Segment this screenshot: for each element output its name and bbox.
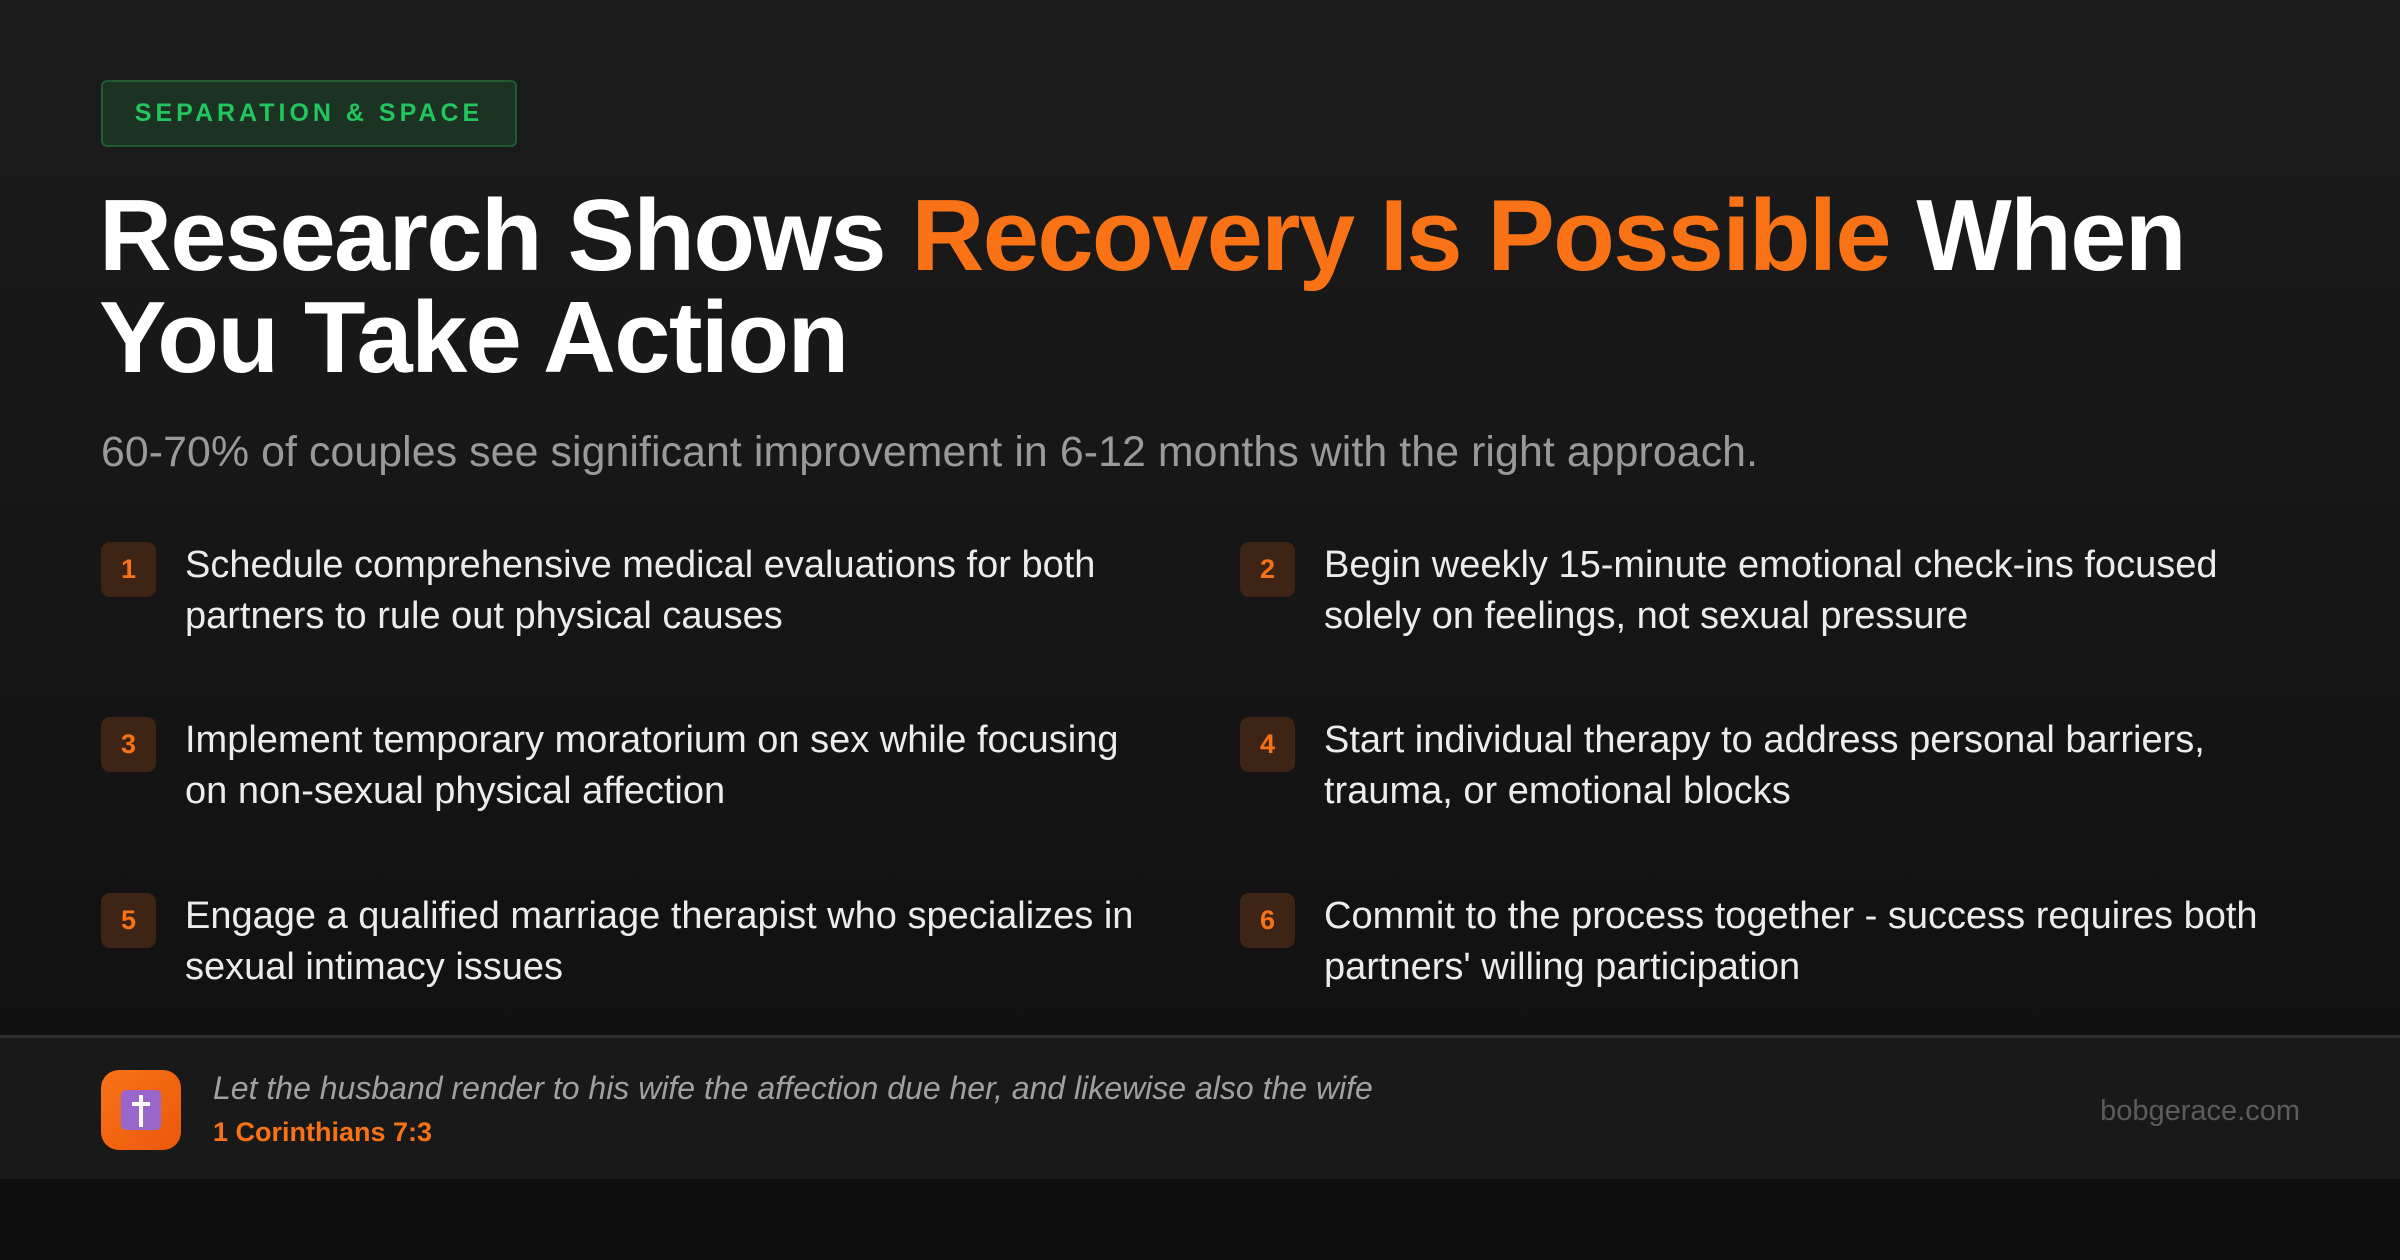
title: You Take Action xyxy=(99,282,848,394)
item 3: 3 xyxy=(121,729,136,759)
item 1: Schedule comprehensive medical evaluations for both xyxy=(185,544,1095,586)
item 5: 5 xyxy=(121,905,136,935)
item 4: trauma, or emotional blocks xyxy=(1324,770,1791,812)
footer xyxy=(0,1035,2400,1179)
item 1: 1 xyxy=(121,554,136,584)
icon: cross xyxy=(101,1070,181,1150)
title xyxy=(99,180,2185,394)
item 5 xyxy=(101,893,1133,988)
item 4 xyxy=(1240,717,2205,812)
item 1 xyxy=(101,542,1095,637)
item 3: on non-sexual physical affection xyxy=(185,770,725,812)
item 6 xyxy=(1240,893,2258,988)
item 2: Begin weekly 15-minute emotional check-ins focused xyxy=(1324,544,2217,586)
item 6: 6 xyxy=(1260,905,1275,935)
badge xyxy=(101,80,517,147)
item 5: sexual intimacy issues xyxy=(185,946,563,988)
item 3: Implement temporary moratorium on sex while focusing xyxy=(185,719,1118,761)
item 3 xyxy=(101,717,1118,812)
item 2: 2 xyxy=(1260,554,1275,584)
item 6: partners' willing participation xyxy=(1324,946,1800,988)
quote: Let the husband render to his wife the affection due her, and likewise also the wife xyxy=(213,1070,1373,1106)
title: Research Shows Recovery Is Possible When xyxy=(99,180,2185,292)
item 4: 4 xyxy=(1260,729,1275,759)
subtitle: 60-70% of couples see significant improvement in 6-12 months with the right approach. xyxy=(101,428,1758,476)
badge: SEPARATION & SPACE xyxy=(135,99,483,127)
item 2: solely on feelings, not sexual pressure xyxy=(1324,595,1968,637)
item 1: partners to rule out physical causes xyxy=(185,595,783,637)
item 5: Engage a qualified marriage therapist who specializes in xyxy=(185,895,1133,937)
item 4: Start individual therapy to address personal barriers, xyxy=(1324,719,2205,761)
reference: 1 Corinthians 7:3 xyxy=(213,1117,432,1147)
item 6: Commit to the process together - success requires both xyxy=(1324,895,2258,937)
site: bobgerace.com xyxy=(2100,1095,2300,1127)
item 2 xyxy=(1240,542,2217,637)
